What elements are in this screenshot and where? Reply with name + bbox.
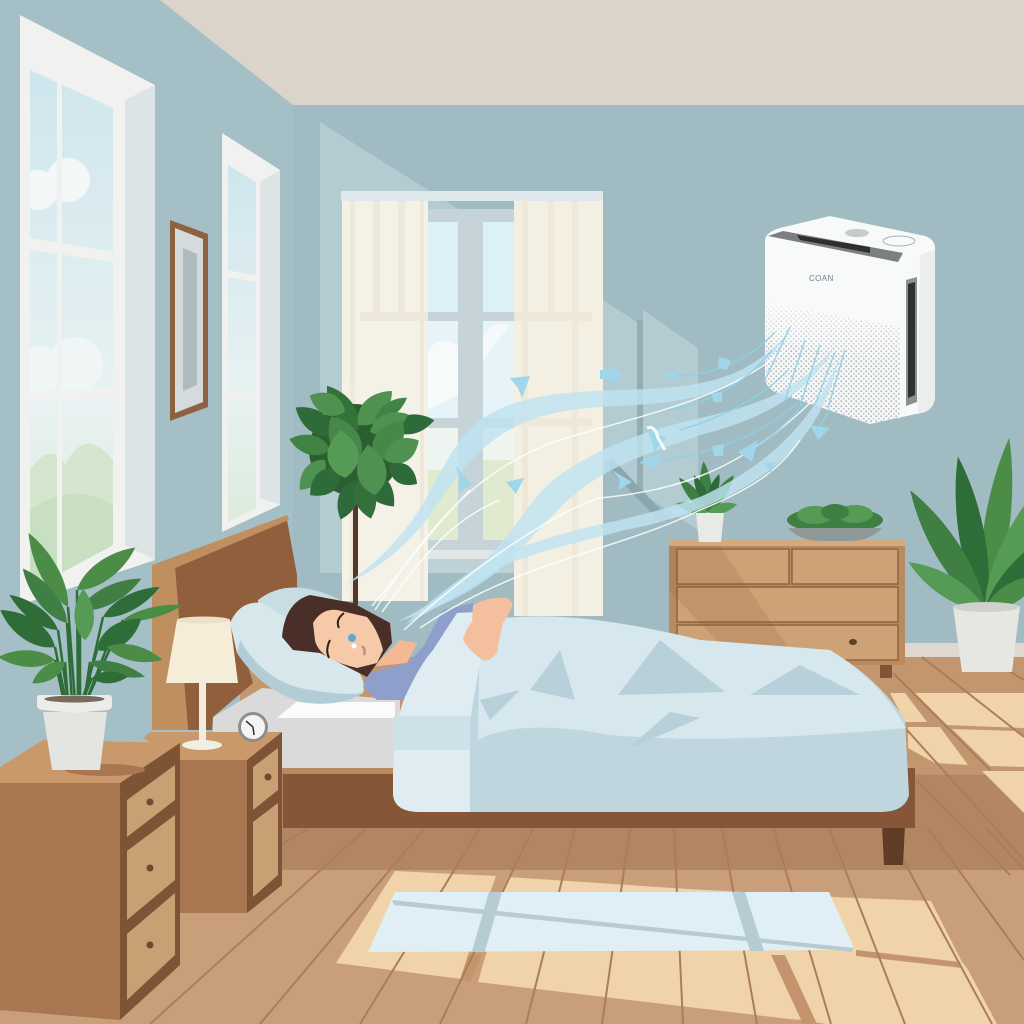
dresser drawers: [677, 549, 898, 660]
duvet top surface: [478, 616, 906, 740]
ceiling: [160, 0, 1024, 105]
small arrows: [455, 357, 830, 494]
broad ribbon upper: [345, 330, 790, 585]
shadow diagonal on dresser: [669, 546, 800, 665]
thin blue airflow lines: [640, 327, 845, 463]
back window with curtains: [341, 191, 603, 616]
alarm clock: [238, 712, 268, 742]
arm over duvet: [463, 598, 512, 660]
light beam on wall: [320, 122, 698, 573]
dresser: [669, 540, 905, 678]
face: [313, 610, 383, 668]
plant leaves: [0, 528, 184, 689]
window shadow bars on floor: [460, 950, 962, 1024]
baseboard: [905, 643, 1024, 657]
left wall: [0, 0, 293, 780]
side vent: [906, 277, 917, 406]
mattress: [213, 688, 400, 768]
top control panel: [768, 231, 903, 262]
back pillow: [258, 588, 345, 640]
hair: [282, 595, 392, 677]
brand label: COAN: [809, 274, 834, 283]
duvet fold: [393, 612, 480, 812]
rug: [368, 892, 855, 952]
bowl plant on dresser: [787, 504, 883, 541]
floor planks: [0, 657, 1024, 1024]
window muntins: [30, 70, 113, 580]
sunlight patches lower: [336, 871, 496, 979]
potted tree: [287, 380, 436, 605]
duvet: [393, 612, 909, 812]
front pillow: [230, 603, 364, 704]
headboard inner panel: [175, 520, 297, 730]
window panes: [428, 222, 514, 540]
small left window: [222, 133, 280, 532]
floor shadow under bed: [240, 770, 1024, 870]
plant stems: [55, 590, 123, 702]
left potted plant: [0, 528, 184, 770]
drawer knob: [849, 639, 857, 645]
shadow under pot: [65, 764, 145, 776]
bed: [152, 515, 915, 865]
duvet creases: [480, 640, 860, 750]
floor: [0, 657, 1024, 1024]
speckled grille: [766, 303, 900, 423]
broad ribbon middle: [397, 345, 835, 622]
nose clip: [348, 634, 356, 648]
small plant on dresser: [675, 461, 738, 542]
white curl: [647, 427, 665, 450]
mouth: [362, 646, 365, 655]
sunlight patches right: [890, 693, 927, 722]
plant pot: [43, 712, 107, 770]
tree leaves: [287, 380, 436, 523]
broad ribbon lower: [405, 355, 840, 625]
headboard frame: [152, 515, 289, 730]
outside view: clouds and trees: [30, 158, 113, 590]
curtain rod: [341, 191, 603, 201]
front nightstand: [0, 740, 180, 1020]
sleeping person: [282, 595, 490, 700]
air purifier: [765, 216, 935, 424]
left curtain: [342, 201, 428, 601]
bed frame: [283, 768, 915, 828]
bed leg: [882, 825, 905, 865]
table lamp: [166, 616, 238, 750]
small window muntins: [228, 270, 256, 399]
front nightstand drawers: [127, 765, 175, 1000]
right curtain: [514, 201, 603, 616]
large left window: [16, 15, 155, 605]
curtain folds and bands: [350, 201, 592, 616]
back wall: [293, 105, 1024, 665]
thin white airflow lines: [372, 345, 810, 630]
right floor plant: [900, 436, 1024, 672]
framed picture: [170, 220, 208, 421]
nightstand behind: [143, 732, 282, 913]
neck: [370, 640, 417, 667]
closed eyes: [327, 613, 344, 658]
rug shadow bars: [392, 892, 854, 952]
shirt: [363, 603, 490, 700]
side drawers: [253, 748, 278, 897]
air streams: [345, 327, 845, 630]
